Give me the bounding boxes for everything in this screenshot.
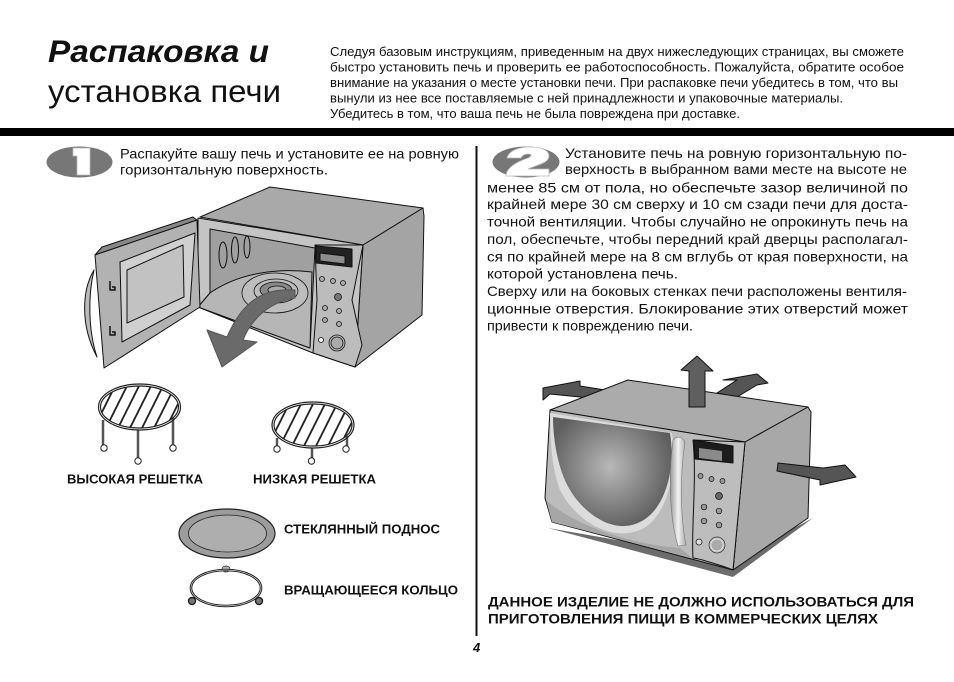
step 2 text: крайней мере 30 см сверху и 10 см сзади печи для доста-	[487, 196, 908, 212]
panel buttons	[318, 276, 346, 351]
low rack	[271, 401, 355, 465]
high rack	[98, 383, 182, 465]
rack labels: ВЫСОКАЯ РЕШЕТКА	[67, 472, 203, 486]
oven front frame	[198, 218, 363, 367]
header rule	[0, 128, 954, 136]
column divider	[476, 146, 478, 636]
step 1 text: Распакуйте вашу печь и установите ее на ровную	[120, 146, 459, 162]
door handle	[670, 437, 686, 546]
intro text block: Убедитесь в том, что ваша печь не была повреждена при доставке.	[330, 106, 740, 121]
step 2 badge	[492, 146, 560, 178]
rack labels: НИЗКАЯ РЕШЕТКА	[253, 472, 376, 486]
title: Распаковка и	[48, 33, 269, 69]
tray and ring labels: ВРАЩАЮЩЕЕСЯ КОЛЬЦО	[284, 584, 458, 598]
right arrow	[777, 463, 856, 485]
step 2 text: которой установлена печь.	[487, 266, 678, 282]
warning text	[488, 594, 914, 628]
tray and ring labels	[284, 522, 458, 598]
step 2 text: Сверху или на боковых стенках печи расположены вентиля-	[487, 283, 907, 299]
warning text: ПРИГОТОВЛЕНИЯ ПИЩИ В КОММЕРЧЕСКИХ ЦЕЛЯХ	[488, 612, 879, 628]
door glass	[553, 417, 672, 526]
control panel	[693, 440, 745, 570]
intro text block: Следуя базовым инструкциям, приведенным на двух нижеследующих страницах, вы сможете	[330, 44, 904, 59]
door window	[127, 245, 184, 323]
title	[48, 33, 281, 109]
intro text block: вынули из нее все поставляемые с ней принадлежности и упаковочные материалы.	[330, 90, 843, 106]
warning text: ДАННОЕ ИЗДЕЛИЕ НЕ ДОЛЖНО ИСПОЛЬЗОВАТЬСЯ ДЛЯ	[488, 594, 914, 610]
step 2 text: Установите печь на ровную горизонтальную по-	[565, 145, 907, 161]
step 2 text	[487, 145, 909, 334]
step 1 badge	[46, 146, 112, 178]
panel buttons	[696, 474, 725, 553]
door hooks	[110, 281, 115, 335]
step 2 text: привести к повреждению печи.	[487, 318, 693, 334]
oven top	[200, 187, 423, 245]
rack labels	[67, 472, 376, 486]
door	[95, 217, 197, 255]
step 2 text: пол, обеспечьте, чтобы передний край дверцы располагал-	[487, 231, 908, 247]
oven cavity	[198, 229, 315, 348]
step 1 text: горизонтальную поверхность.	[120, 162, 328, 178]
step 2 text: точной вентиляции. Чтобы случайно не опрокинуть печь на	[487, 214, 908, 230]
rotating ring	[188, 566, 262, 606]
front	[545, 410, 745, 570]
tray and ring labels: СТЕКЛЯННЫЙ ПОДНОС	[284, 522, 440, 536]
intro text block: внимание на указания о месте установки печи. При распаковке печи убедитесь в том, что вы	[330, 75, 898, 90]
oven side	[355, 208, 424, 367]
glass tray	[179, 509, 275, 558]
step 1 text	[120, 146, 459, 178]
step 2 text: менее 85 см от пола, но обеспечьте зазор величиной по	[487, 180, 908, 196]
step 2 text: ционные отверстия. Блокирование этих отверстий может	[487, 300, 909, 316]
title: установка печи	[48, 73, 281, 109]
step 2 text: ся по крайней мере на 8 см вглубь от края поверхности, на	[487, 248, 908, 264]
control panel	[313, 245, 363, 367]
page number: 4	[472, 640, 481, 655]
closed microwave illustration	[543, 356, 856, 577]
removal arrow	[207, 290, 295, 367]
intro text block	[330, 44, 904, 121]
top	[550, 380, 808, 442]
intro text block: быстро установить печь и проверить ее работоспособность. Пожалуйста, обратите особое	[330, 60, 904, 74]
side	[733, 407, 811, 570]
vent holes	[219, 236, 250, 268]
door lower highlight	[546, 500, 692, 558]
step 2 text: верхность в выбранном вами месте на высоте не	[565, 161, 907, 177]
door back bulge	[85, 270, 97, 357]
rear arrows	[543, 381, 605, 400]
open microwave illustration	[85, 187, 424, 368]
door inner frame	[120, 233, 195, 342]
up arrow	[681, 356, 713, 407]
floor shadow	[548, 518, 813, 577]
turntable hub	[242, 273, 308, 313]
door glass halo	[550, 413, 673, 533]
